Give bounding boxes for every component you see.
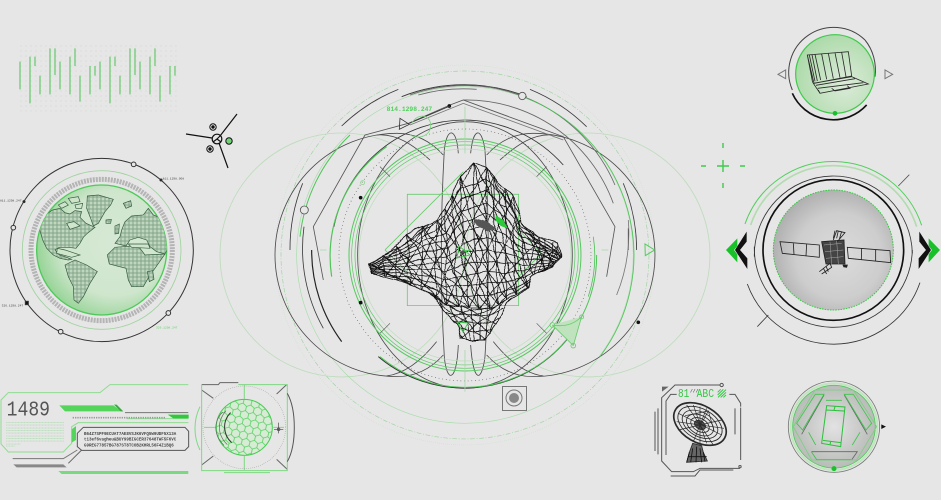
coordinate label: 814.1298.247 [387,106,432,113]
phone icon [822,406,845,447]
chevrons [726,232,940,269]
green microtext: XXXXXXXXXXXXXXXXXXXXXXXXXXXXXXXXXXXXXXX [6,434,65,437]
green microtext: XXXXXXXXXXXXXXXXXXXXXXXXXXXXXXXXXXXXXXX [6,440,65,443]
coordinate labels [0,178,184,330]
laptop icon [807,52,868,93]
green concentric rings [349,139,581,371]
panel: radio dish: ABC [697,387,714,401]
green bars [13,405,189,474]
coordinate labels: 811.1298.247 [0,200,22,203]
black dots [359,104,640,324]
panel: central radar [220,65,710,445]
panel: phone [788,381,886,472]
mesh: central mountain [369,163,561,340]
green microtext [6,421,65,448]
angular frame line [313,100,615,280]
green microtext: XXXXXXXXXXXXXXXXXXXXXXXXXXXXXXXXXXXXXXX [6,424,65,427]
green microtext: XXXXXXXXXXXXXXXXXXXXXXXXXXXXXXXXXXXXXXX [6,437,65,440]
green microtext: XXXXXXXXXXXXXXXXXXXXXXXXXXXXXXXXXXXXXXX [6,432,65,435]
ring markers [11,162,171,334]
dish icon [666,394,734,462]
ring markers [300,92,526,214]
green highlight patch [496,216,508,228]
panel: radio dish: /// [690,388,699,394]
coordinate labels: 326.1298.247 [2,305,23,308]
axis ticks [380,167,547,333]
outer dash dot ring [281,71,649,439]
tracker triangle [399,106,450,137]
dish label: 81 [678,387,689,401]
green microtext: XXXXXXXXXXXXXXXXXXXXXXXXXXXXXXXXXXXXXXX [6,426,65,429]
green microtext: XXXXXXXXXXXXXXXXXXXXXXXXXXXXXXXXXXXXXXX [6,421,65,424]
panel: data readout [1,385,189,474]
coordinate labels: 811.1298.008 [163,178,184,181]
panel: honeycomb sphere [195,383,294,473]
panel: radio dish [655,383,741,476]
panel: laptop [778,27,893,120]
panel: data readout: G9REG77857BG787ST8TCOB2KHRL56F4Z1BQ6 [84,444,174,448]
icon: green crosshair [701,143,745,188]
green microtext: XXXXXXXXXX [6,442,21,445]
code box [77,427,189,450]
panel: data readout: t13ef6vagheu&BUY99BIGCER37648TWF5F6VC [84,438,177,443]
heading number: 1489 [7,398,50,422]
honeycomb lines [217,400,272,455]
panel: satellite [726,161,940,344]
coordinate labels: 326.1298.247 [156,327,178,330]
icon: target button [502,386,526,410]
green markers on mesh [457,246,471,332]
continents [38,195,172,303]
dark side loops [275,122,655,388]
green microtext: XXXXXXXXXXXXXXXXXXXXXXXXXXXXXXXXXXXXXXX [6,429,65,432]
panel: data readout: B64Z7SPF9ECUAT7AE8VSJK6VFQ5W9UDF5X13A [84,433,177,437]
barcode dot grid panel [18,42,177,112]
green triangle [645,244,655,256]
icon: three node hub [186,114,237,168]
green square target [385,172,542,306]
dark shadow patch [474,218,496,232]
panel: globe [0,158,193,342]
filled green triangle [550,315,584,348]
pale side circles [220,133,710,377]
satellite icon [780,231,891,274]
heavy arcs [290,85,637,388]
green arcs [300,98,634,387]
green microtext: XXXXXX [6,445,15,448]
